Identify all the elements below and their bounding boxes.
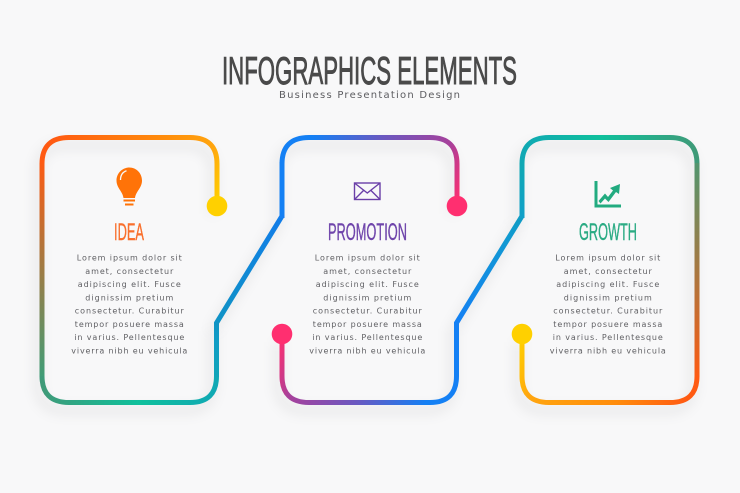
body text: idea: in varius. Pellentesque [74,333,184,342]
frame line [42,138,282,402]
connector dot: top [447,196,467,216]
frame shadow [212,146,518,410]
frame line [522,138,697,402]
frame line [282,138,522,402]
subtitle: Business Presentation Design [279,90,460,101]
panel: promotion [212,138,522,410]
body text: promotion: in varius. Pellentesque [312,333,422,342]
body text: growth: tempor posuere massa [553,320,662,329]
panel: growth [512,138,697,410]
body text: growth [550,254,666,355]
body text: idea: viverra nibh eu vehicula [71,346,187,355]
body text: growth: in varius. Pellentesque [553,333,663,342]
body text: promotion: adipiscing elit. Fusce [316,280,419,289]
body text: idea: adipiscing elit. Fusce [78,280,181,289]
body text: growth: Lorem ipsum dolor sit [555,254,660,262]
frame shadow [38,146,213,410]
body text: promotion: dignissim pretium [323,293,412,302]
body text: idea: amet, consectetur [85,267,174,276]
icon: light bulb [116,168,142,206]
heading: idea: IDEA [114,219,144,246]
body text: promotion: viverra nibh eu vehicula [309,346,425,355]
body text: idea [71,254,187,355]
body text: growth: consectetur. Curabitur [553,306,663,316]
body text: growth: viverra nibh eu vehicula [550,346,666,355]
body text: promotion: consectetur. Curabitur [313,306,423,316]
connector dot [512,324,532,344]
body text: promotion [309,254,425,355]
heading: promotion: PROMOTION [328,219,407,246]
body text: growth: dignissim pretium [564,293,652,302]
body text: promotion: amet, consectetur [323,267,412,276]
body text: promotion: Lorem ipsum dolor sit [315,254,420,262]
connector dot: bottom [272,324,292,344]
body text: idea: tempor posuere massa [75,320,184,329]
body text: growth: amet, consectetur [564,267,653,276]
icon: growth chart [594,181,621,208]
heading: growth: GROWTH [579,219,637,246]
icon: envelope [354,183,380,200]
body text: idea: consectetur. Curabitur [75,306,185,316]
body text: promotion: tempor posuere massa [313,320,422,329]
title: INFOGRAPHICS ELEMENTS [222,50,517,93]
body text: idea: Lorem ipsum dolor sit [77,254,182,262]
panel: idea [38,138,282,410]
body text: idea: dignissim pretium [85,293,174,302]
connector dot [207,196,227,216]
body text: growth: adipiscing elit. Fusce [556,280,659,289]
frame shadow [518,146,693,410]
